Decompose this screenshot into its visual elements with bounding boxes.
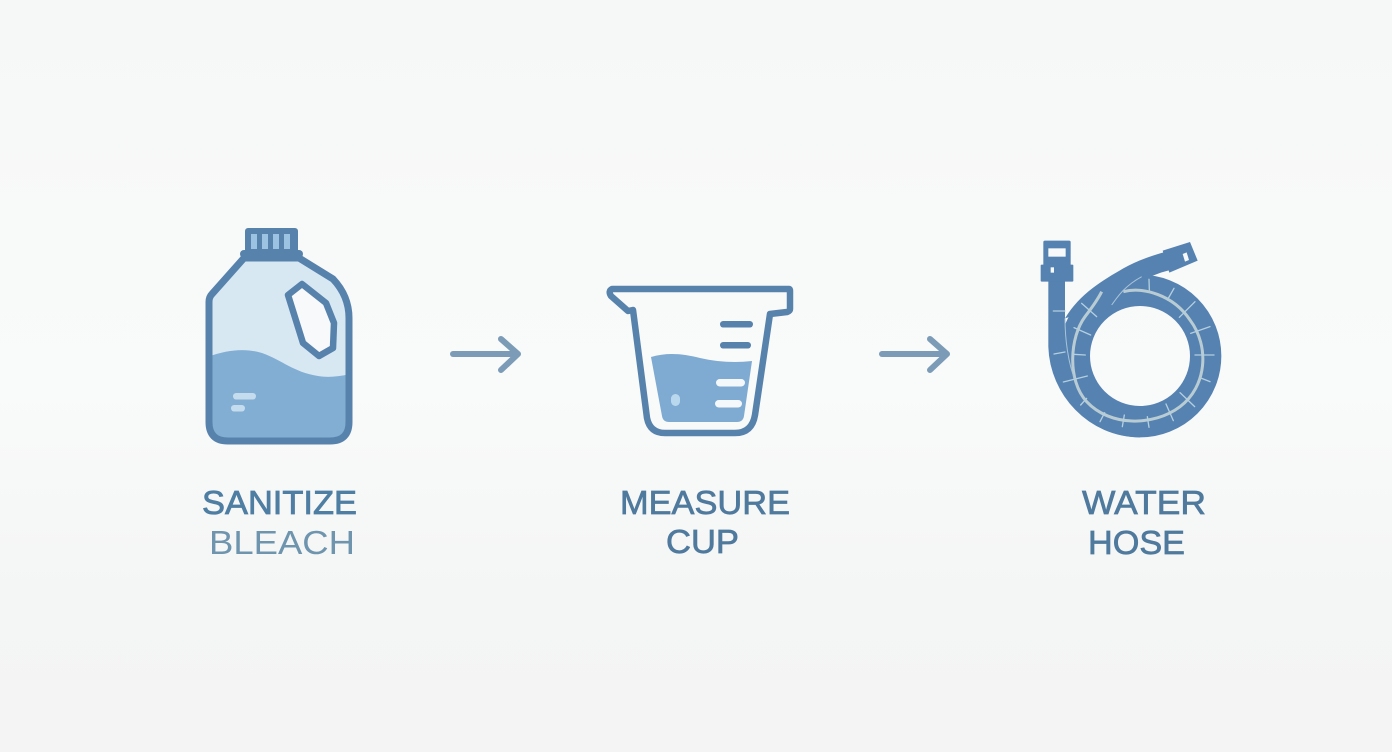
label: sanitize bleach: BLEACH (209, 524, 355, 561)
label: measure cup (620, 484, 790, 560)
step 2: measuring cup icon (610, 289, 790, 433)
label: water hose: WATER (1082, 484, 1206, 521)
liquid highlights (231, 393, 256, 412)
hose right run (1065, 251, 1173, 318)
label: sanitize bleach (202, 484, 357, 561)
cup outline (610, 289, 790, 433)
bottle body fill (209, 258, 349, 441)
hose left run (1057, 280, 1140, 429)
lower measure marks (715, 379, 745, 408)
label: water hose (1082, 484, 1206, 561)
bottle neck collar (240, 250, 303, 258)
step 3: coiled water hose icon (1041, 241, 1214, 429)
hose reinforcement line (1073, 290, 1203, 421)
infographic: three-step process (203, 228, 1222, 555)
right connector (1163, 242, 1198, 273)
label: water hose: HOSE (1088, 524, 1185, 561)
hose coil (1074, 290, 1206, 422)
label: sanitize bleach: SANITIZE (202, 484, 357, 521)
arrow: step 2 to step 3 (882, 339, 947, 370)
bottle cap (245, 228, 298, 256)
hose ribs (1053, 279, 1214, 427)
liquid bubble (671, 394, 680, 406)
arrow: step 1 to step 2 (453, 339, 518, 370)
step 1: bleach bottle icon (205, 228, 352, 445)
upper measure marks (720, 321, 753, 348)
cup liquid (651, 354, 752, 422)
inner strand (1065, 277, 1142, 380)
cap ridges (251, 234, 290, 249)
left connector (1041, 241, 1073, 282)
label: measure cup: MEASURE (620, 484, 790, 521)
label: measure cup: CUP (666, 523, 739, 560)
bottle outline (209, 258, 349, 441)
bottle liquid (212, 350, 346, 438)
bottle handle (288, 284, 334, 356)
